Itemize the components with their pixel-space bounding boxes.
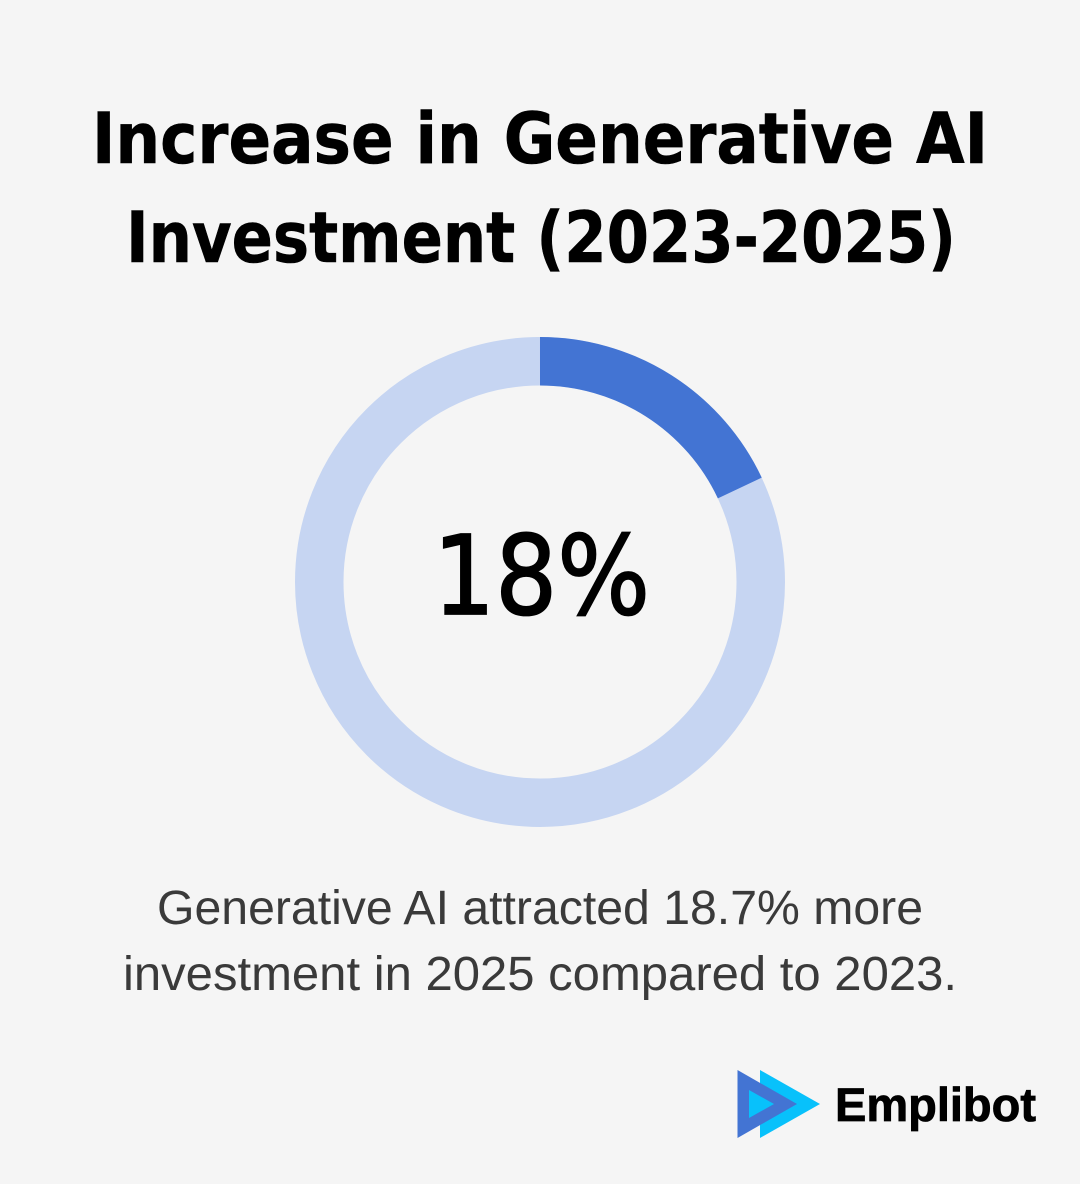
title: Investment (2023-2025): [126, 197, 956, 279]
logo: Emplibot: [738, 1070, 1036, 1138]
donut value: 18%: [433, 512, 650, 640]
caption: Generative AI attracted 18.7% more: [157, 882, 923, 935]
donut chart: 18%: [319, 361, 761, 803]
caption: investment in 2025 compared to 2023.: [123, 948, 957, 1001]
title: [92, 98, 988, 279]
caption: [123, 882, 957, 1001]
title: Increase in Generative AI: [92, 98, 988, 180]
icon: play triangles: [738, 1070, 820, 1138]
logo wordmark: Emplibot: [835, 1078, 1036, 1131]
